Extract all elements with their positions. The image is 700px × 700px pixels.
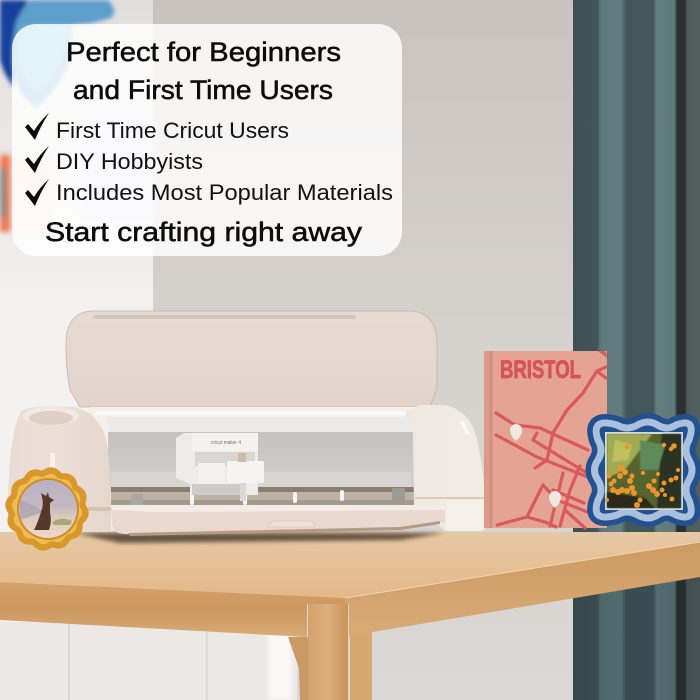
book map lines (496, 367, 606, 528)
heading: Perfect for Beginners (66, 37, 341, 67)
carriage with cricut maker 4 label (176, 433, 264, 501)
item: first time users: First Time Cricut Users (56, 118, 289, 143)
heading (66, 37, 341, 105)
photo: dog (19, 480, 77, 538)
machine beam (90, 407, 440, 435)
cavity (108, 432, 414, 492)
map pins (510, 424, 561, 508)
left body with cup holder (8, 406, 111, 532)
machine lid (66, 311, 437, 407)
closing line: Start crafting right away (45, 217, 363, 247)
text panel (12, 24, 402, 256)
table top (0, 532, 700, 598)
right body (405, 405, 485, 531)
tray (111, 505, 445, 536)
wall decoration: blue shell and orange frame (0, 0, 154, 232)
item: materials: Includes Most Popular Materials (56, 180, 393, 205)
carriage with cricut maker 4 label: cricut maker 4 (211, 440, 241, 446)
heading: and First Time Users (73, 75, 333, 105)
item: hobbyists: DIY Hobbyists (56, 149, 203, 174)
table legs (288, 604, 372, 700)
table (0, 532, 700, 700)
table front edges (0, 582, 345, 637)
shadow under machine (75, 533, 445, 543)
book title: BRISTOL (500, 356, 581, 384)
cutting machine (8, 311, 485, 536)
rails (111, 487, 415, 506)
pink Bristol book (484, 351, 607, 528)
checklist (25, 113, 393, 206)
panel background (12, 24, 402, 256)
yellow scalloped photo frame with dog (10, 472, 84, 546)
photo: orange berries (605, 432, 683, 510)
blue wavy photo frame (594, 422, 692, 518)
